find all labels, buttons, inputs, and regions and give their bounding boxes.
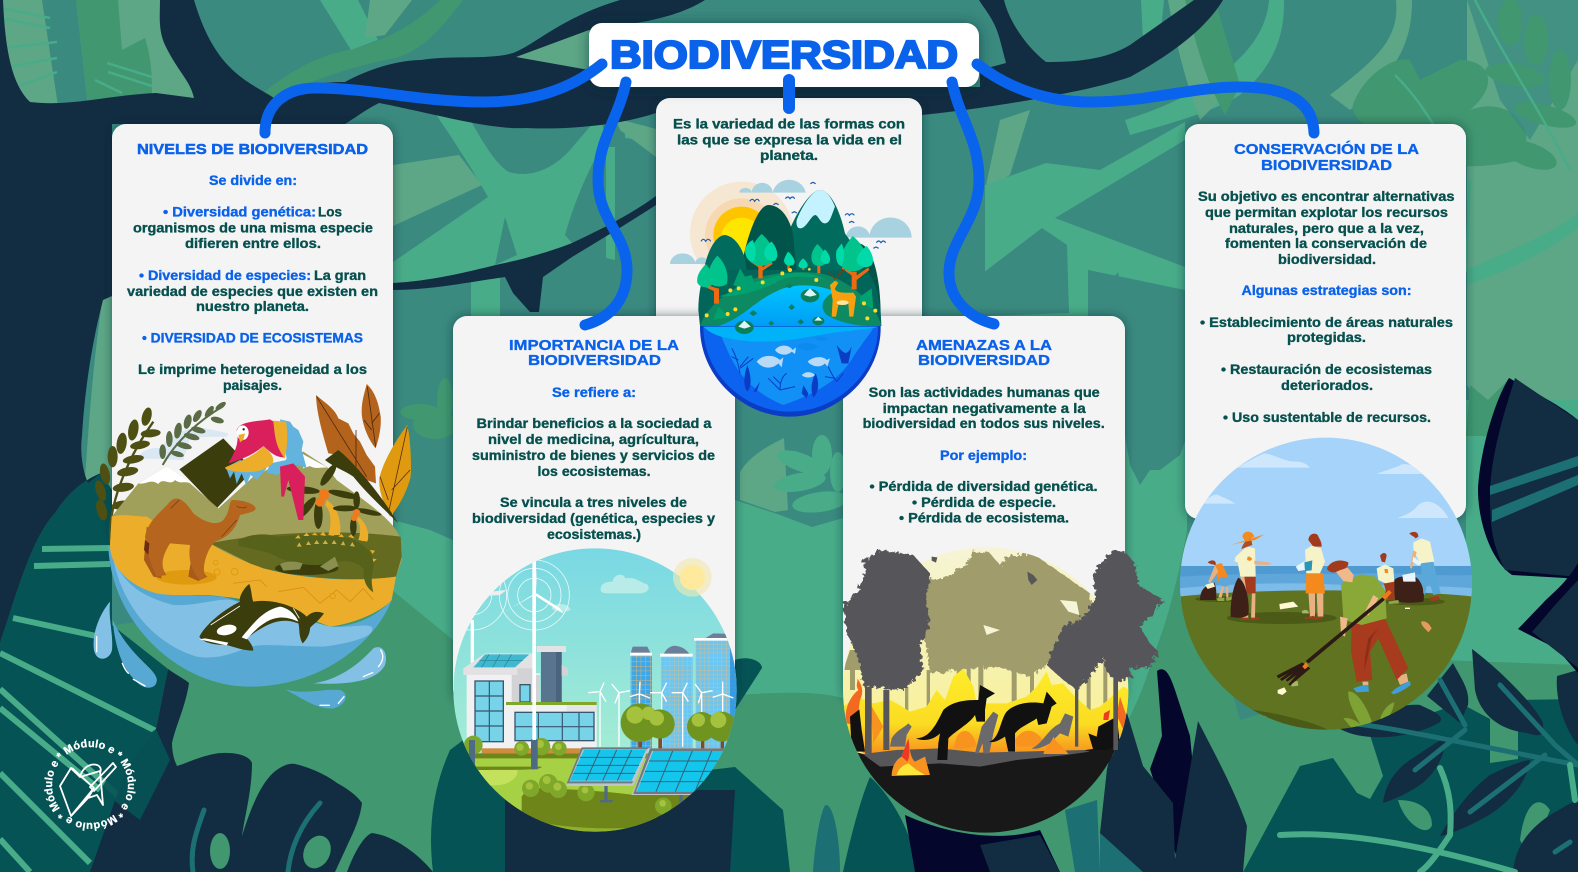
panel: conservación de la biodiversidad xyxy=(1185,124,1466,519)
arrow: to definición xyxy=(783,80,795,108)
text block: conservación body: Algunas estrategias son: xyxy=(1242,283,1412,298)
text block: importancia body: los ecosistemas. xyxy=(538,464,650,479)
arrow: to amenazas xyxy=(949,82,994,324)
text block: niveles body: Le imprime heterogeneidad a los xyxy=(138,362,367,377)
text block: niveles body: Se divide en: xyxy=(209,173,297,188)
text block: niveles body: • DIVERSIDAD DE ECOSISTEMAS xyxy=(142,331,363,346)
text block: conservación body: biodiversidad. xyxy=(1278,252,1376,267)
heading: importancia: IMPORTANCIA DE LA xyxy=(509,338,680,354)
connectors: title to panels xyxy=(265,64,1314,325)
text block: conservación body: • Restauración de ecosistemas xyxy=(1221,362,1432,377)
text block: importancia body: biodiversidad (genética, especies y xyxy=(472,511,716,526)
panel: niveles de biodiversidad xyxy=(112,124,393,544)
heading: conservación: CONSERVACIÓN DE LA xyxy=(1234,140,1420,158)
illustration: ecosystem egg with lake and sea xyxy=(670,180,912,417)
arrow: to importancia xyxy=(585,82,627,325)
text block: importancia body: suministro de bienes y servicios de xyxy=(472,448,715,463)
text block: importancia body: Se refiere a: xyxy=(552,385,636,400)
illustration: sustainable city circle xyxy=(437,547,743,833)
heading: amenazas: AMENAZAS A LA xyxy=(916,338,1053,354)
text block: amenazas body: • Pérdida de diversidad genética. xyxy=(870,479,1098,494)
heading: amenazas xyxy=(916,338,1053,369)
icon: book and pencil xyxy=(60,763,116,816)
text block: definición: las que se expresa la vida en el xyxy=(677,132,902,148)
text block: niveles body: Los xyxy=(318,205,342,220)
text block: conservación body: deteriorados. xyxy=(1281,378,1373,393)
arrow: to conservación xyxy=(977,64,1314,133)
text block: conservación body: • Establecimiento de áreas naturales xyxy=(1200,315,1453,330)
text block: niveles body: nuestro planeta. xyxy=(196,299,309,314)
heading: importancia xyxy=(509,338,680,369)
text block: conservación body: naturales, pero que a la vez, xyxy=(1229,221,1424,236)
title card xyxy=(589,23,979,87)
heading: conservación: BIODIVERSIDAD xyxy=(1261,158,1392,174)
text block: amenazas body xyxy=(863,385,1105,526)
illustration: forest fire circle xyxy=(840,543,1163,833)
panel: importancia de la biodiversidad xyxy=(453,316,735,703)
text block: niveles body: • Diversidad de especies: xyxy=(139,268,311,283)
text block: amenazas body: impactan negativamente a la xyxy=(883,401,1086,416)
text block: niveles body: difieren entre ellos. xyxy=(185,236,321,251)
text block: importancia body: ecosistemas.) xyxy=(547,527,641,542)
text block: amenazas body: Por ejemplo: xyxy=(940,448,1027,463)
panel: amenazas a la biodiversidad xyxy=(843,316,1125,703)
text block: niveles body: La gran xyxy=(314,268,366,283)
text block: conservación body: • Uso sustentable de recursos. xyxy=(1223,410,1431,425)
text block: importancia body: Brindar beneficios a la sociedad a xyxy=(476,416,712,431)
text block: conservación body: Su objetivo es encontrar alternativas xyxy=(1198,189,1454,204)
text block: amenazas body: • Pérdida de ecosistema. xyxy=(899,510,1069,526)
panel: definición central xyxy=(656,98,922,338)
text block: importancia body: nivel de medicina, agrícultura, xyxy=(488,432,699,447)
text block: conservación body xyxy=(1198,189,1454,425)
text block: definición: Es la variedad de las formas con xyxy=(673,116,905,131)
text block: conservación body: protegidas. xyxy=(1287,330,1366,345)
text block: niveles body: variedad de especies que existen en xyxy=(127,284,378,299)
heading: importancia: BIODIVERSIDAD xyxy=(528,353,661,369)
illustration: people cleaning park circle xyxy=(1178,435,1475,735)
heading: niveles: NIVELES DE BIODIVERSIDAD xyxy=(137,142,368,158)
text block: amenazas body: Son las actividades humanas que xyxy=(869,385,1100,400)
text block: niveles body: organismos de una misma especie xyxy=(133,221,373,236)
heading: amenazas: BIODIVERSIDAD xyxy=(918,353,1050,369)
text block: importancia body xyxy=(472,385,716,542)
text block: niveles body: • Diversidad genética: xyxy=(163,205,316,220)
heading: conservación xyxy=(1234,140,1420,174)
text block: importancia body: Se vincula a tres niveles de xyxy=(500,495,687,510)
text block: conservación body: fomenten la conservación de xyxy=(1225,236,1427,251)
text block: definición xyxy=(673,116,905,163)
arrow: to niveles xyxy=(265,64,602,133)
text block: conservación body: que permitan explotar los recursos xyxy=(1205,205,1448,220)
logo: Módulo e: Módulo e * Módulo e * Módulo e * Módulo e * xyxy=(44,739,136,831)
illustration: biodiversity globe with animals xyxy=(93,384,411,708)
text block: definición: planeta. xyxy=(760,148,818,163)
title: BIODIVERSIDAD xyxy=(610,34,958,77)
text block: amenazas body: biodiversidad en todos sus niveles. xyxy=(863,416,1105,431)
text block: niveles body: paisajes. xyxy=(223,378,282,393)
text block: amenazas body: • Pérdida de especie. xyxy=(912,495,1056,510)
text block: niveles body xyxy=(127,173,378,393)
